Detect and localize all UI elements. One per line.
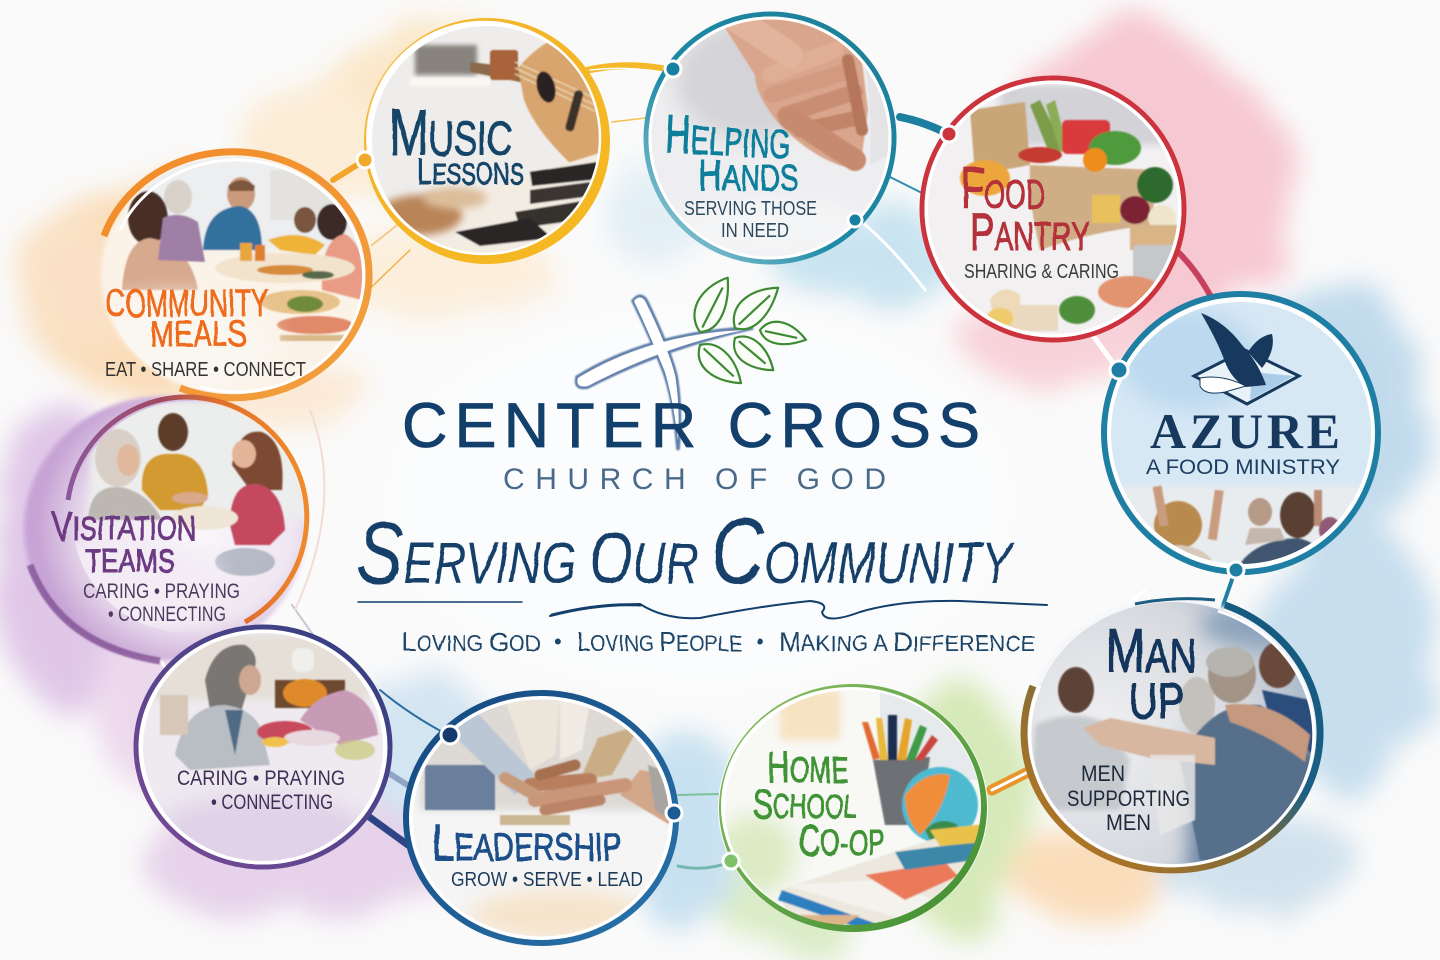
- title: center cross: CENTER CROSS: [402, 391, 980, 461]
- caption: • CONNECTING: [108, 603, 226, 626]
- ring: [364, 18, 610, 264]
- panel: man up: [1020, 590, 1330, 880]
- heading: home school co-op: SCHOOL: [753, 780, 857, 827]
- panel: visitation teams: [20, 396, 310, 661]
- ring: [1104, 294, 1378, 572]
- caption: EAT • SHARE • CONNECT: [105, 359, 306, 381]
- photo: caring at table: [143, 633, 383, 861]
- heading: home school co-op: HOME: [767, 743, 848, 792]
- heading: music lessons: [389, 95, 524, 192]
- photo: guitar and piano: [372, 26, 599, 253]
- nodes: [441, 726, 682, 821]
- heading: visitation teams: VISITATION: [52, 505, 196, 549]
- nodes: [1110, 361, 1244, 578]
- heading: home school co-op: CO-OP: [798, 816, 885, 865]
- panel: community meals: [75, 150, 369, 398]
- heading: home school co-op: [753, 743, 885, 865]
- icon: leaves: [686, 270, 808, 394]
- photo: crowd on blue wash: [1111, 302, 1371, 564]
- heading: helping hands: [663, 104, 798, 200]
- heading: community meals: COMMUNITY: [106, 283, 269, 325]
- heading: community meals: [106, 283, 269, 354]
- caption: [83, 580, 240, 626]
- tagline: •: [756, 629, 764, 654]
- heading: man up: UP: [1129, 673, 1184, 729]
- ring: [30, 397, 307, 661]
- ring: [719, 684, 987, 932]
- photo: family meal: [111, 157, 362, 388]
- panel: azure food ministry: [1100, 290, 1385, 586]
- photo: stacked hands: [413, 700, 669, 936]
- tagline: LOVING PEOPLE: [577, 627, 742, 657]
- ring: [922, 78, 1184, 340]
- caption: SHARING & CARING: [964, 261, 1119, 283]
- logo: cross with olive branch: [576, 270, 808, 450]
- ring: [104, 152, 369, 398]
- caption: [177, 767, 345, 814]
- photo: visit: [74, 401, 304, 631]
- heading: helping hands: HANDS: [698, 151, 798, 200]
- caption: • CONNECTING: [211, 791, 333, 814]
- panel: home school co-op: [715, 680, 995, 940]
- caption: [684, 198, 817, 242]
- photo: groceries: [928, 84, 1178, 334]
- caption: A FOOD MINISTRY: [1146, 456, 1340, 479]
- caption: SERVING THOSE: [684, 198, 817, 220]
- tagline: •: [554, 629, 562, 654]
- heading: food pantry: FOOD: [961, 156, 1045, 221]
- ring: [646, 14, 894, 262]
- ring: [406, 693, 676, 943]
- nodes: [665, 61, 862, 227]
- caption: MEN: [1106, 810, 1151, 835]
- heading: food pantry: PANTRY: [970, 204, 1090, 262]
- caption: MEN: [1081, 761, 1125, 786]
- heading: serving our community: SERVING OUR COMMUNITY: [357, 498, 1015, 603]
- heading: community meals: MEALS: [150, 313, 247, 354]
- heading: helping hands: HELPING: [663, 104, 792, 171]
- heading: music lessons: LESSONS: [417, 151, 524, 192]
- photo: clasped hands: [652, 20, 888, 256]
- tagline: LOVING GOD: [402, 627, 540, 657]
- panel: caring praying connecting: [135, 625, 395, 875]
- connector arcs between circles: [150, 66, 1234, 868]
- icon: eagle on diamond: [1194, 313, 1299, 404]
- caption: CARING • PRAYING: [83, 580, 240, 603]
- ring: [1024, 599, 1320, 870]
- node: [357, 152, 373, 168]
- decorative underline swoosh: [358, 601, 1047, 618]
- heading: music lessons: MUSIC: [389, 95, 512, 169]
- photo: men embracing: [1031, 602, 1312, 864]
- subtitle: church of god: CHURCH OF GOD: [503, 463, 886, 496]
- ring: [136, 627, 390, 867]
- tagline: MAKING A DIFFERENCE: [779, 627, 1035, 657]
- caption: CARING • PRAYING: [177, 767, 345, 790]
- panel: food pantry: [920, 76, 1190, 346]
- heading: man up: [1106, 617, 1196, 729]
- heading: food pantry: [961, 156, 1090, 262]
- panel: helping hands: [640, 10, 900, 266]
- node: [723, 853, 739, 869]
- photo: school supplies: [725, 690, 981, 925]
- heading: azure: AZURE: [1150, 403, 1340, 459]
- heading: leadership: LEADERSHIP: [432, 814, 622, 872]
- node: [941, 126, 957, 142]
- caption: IN NEED: [721, 220, 789, 242]
- caption: [1067, 761, 1190, 835]
- caption: GROW • SERVE • LEAD: [451, 869, 643, 891]
- tagline: [402, 627, 1035, 657]
- caption: SUPPORTING: [1067, 786, 1190, 811]
- heading: visitation teams: TEAMS: [85, 543, 175, 579]
- heading: visitation teams: [52, 505, 196, 579]
- panel: music lessons: [357, 18, 612, 265]
- panel: leadership: [405, 690, 685, 950]
- heading: man up: MAN: [1106, 617, 1196, 686]
